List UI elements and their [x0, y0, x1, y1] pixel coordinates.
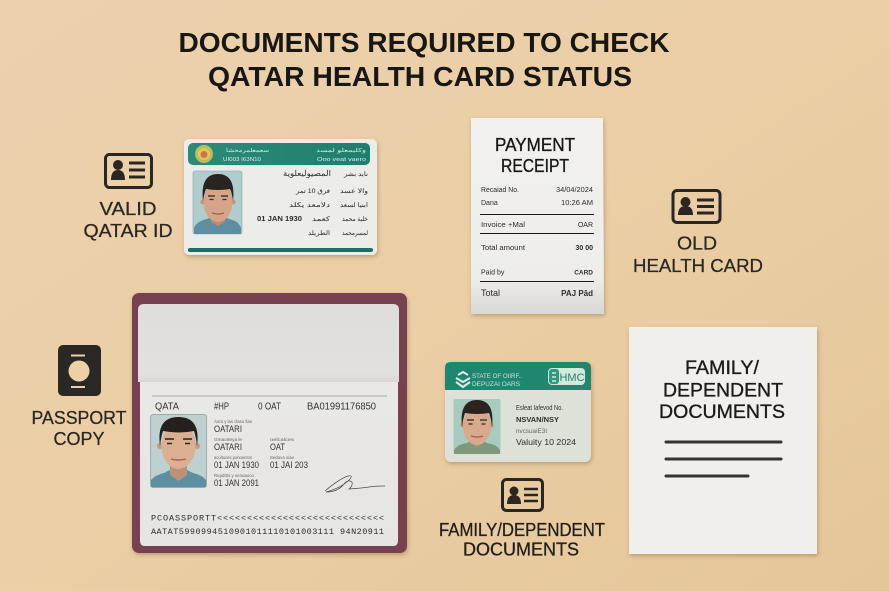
icon: family documents [502, 480, 542, 510]
receipt rows [481, 187, 593, 298]
passport fields: OATARI [214, 424, 242, 434]
receipt heading [495, 134, 575, 176]
passport machine readable zone: PCOASSPORTT<<<<<<<<<<<<<<<<<<<<<<<<<<<< [151, 514, 384, 524]
card fields: خلبة محمد [342, 215, 368, 223]
passport fields [214, 419, 308, 488]
card emblem [195, 145, 213, 163]
card fields: فرق 10 تمر [295, 188, 330, 195]
passport top line: QATA [155, 402, 179, 412]
card photo [193, 171, 242, 234]
passport fields: OATARI [214, 442, 242, 452]
card fields: والا عسد [340, 187, 368, 195]
passport machine readable zone [151, 514, 384, 537]
receipt rows: Paid by [481, 270, 505, 276]
passport top line: #HP [214, 402, 229, 412]
HMC fields: Esleat Iafevod No. [516, 405, 563, 412]
passport photo [150, 414, 206, 488]
label: passport copy [32, 407, 126, 449]
HMC emblem [456, 372, 470, 387]
passport fields: acultuces ponoentos [214, 455, 253, 460]
sheet heading: DEPENDENT [663, 380, 783, 402]
label: family dependent documents: FAMILY/DEPENDENT [439, 520, 605, 540]
card header text: سعمعلمرمحشا [226, 147, 269, 154]
sheet heading: DOCUMENTS [659, 401, 785, 423]
passport fields: Anra y las claso fias [214, 419, 253, 424]
passport fields: Sedova siae [270, 455, 294, 460]
card fields: كعمد [312, 215, 331, 223]
label: old health card: OLD [677, 232, 717, 254]
label: old health card [633, 232, 763, 276]
HMC dependent card [445, 362, 591, 462]
passport fields: 01 JAN 1930 [214, 460, 259, 470]
receipt rows: 10:26 AM [561, 200, 593, 207]
label: family dependent documents: DOCUMENTS [463, 540, 579, 560]
receipt rows: CARD [574, 270, 593, 276]
card fields [257, 169, 368, 237]
receipt heading: RECEIPT [501, 155, 569, 176]
icon: valid Qatar ID [106, 154, 152, 188]
card header text: UI003 I63N10 [223, 157, 261, 163]
HMC photo [454, 399, 500, 454]
sheet heading: FAMILY/ [685, 357, 760, 379]
title: QATAR HEALTH CARD STATUS [208, 61, 632, 92]
passport upper page [138, 304, 399, 382]
HMC header text: DEPUZAI OARS [472, 381, 521, 388]
sheet heading [659, 357, 785, 423]
card fields: نابد بشر [343, 170, 368, 178]
card fields: 01 JAN 1930 [257, 214, 302, 223]
card footer band [188, 248, 373, 252]
card header text: Ooo veat vaero [317, 157, 366, 163]
label: old health card: HEALTH CARD [633, 255, 763, 276]
payment receipt [471, 118, 604, 314]
HMC card header [445, 362, 591, 390]
card fields: دلامعد يكلد [289, 201, 330, 209]
passport fields: 01 JAI 203 [270, 460, 308, 470]
receipt rows: Total [481, 288, 500, 298]
card fields: لمسرمحمد [342, 229, 368, 237]
passport fields: Gmaorteya le [214, 437, 243, 442]
receipt heading: PAYMENT [495, 134, 575, 155]
passport cover [132, 293, 407, 553]
label: valid Qatar ID: VALID [100, 198, 156, 219]
family document sheet [629, 327, 817, 554]
label: valid Qatar ID: QATAR ID [84, 220, 172, 241]
HMC fields: nvcsuaiE3I [516, 429, 547, 435]
passport lower page [140, 382, 398, 546]
HMC fields: NSVAN/NSY [516, 417, 559, 424]
sheet lines [666, 442, 781, 476]
card header band [188, 143, 370, 165]
Qatar ID card [184, 139, 377, 255]
passport top line: 0 OAT [258, 402, 281, 412]
HMC header text [472, 373, 522, 388]
receipt rows: Total amount [481, 245, 525, 252]
HMC logo [548, 368, 585, 385]
icon: passport [58, 345, 101, 396]
card header text: وكليمعلو لمسد [316, 147, 366, 154]
receipt rows: PAJ Pād [561, 289, 593, 298]
HMC header text: STATE OF OIIRF.. [472, 373, 522, 380]
passport top line [155, 402, 376, 412]
label: family dependent documents [439, 520, 605, 560]
receipt rows: Dana [481, 200, 498, 207]
receipt rows: Invoice +Mal [481, 222, 525, 229]
title: DOCUMENTS REQUIRED TO CHECK [178, 27, 670, 58]
card header text [223, 147, 366, 163]
HMC logo: HMC [560, 372, 585, 384]
receipt rows: 34/04/2024 [556, 187, 593, 194]
passport fields: OAT [270, 442, 286, 452]
HMC fields [516, 405, 576, 447]
passport fields: Repdrtis y senoaoco [214, 473, 254, 478]
title [178, 27, 670, 92]
receipt rows: OAR [578, 222, 593, 229]
passport machine readable zone: AATAT5990994510901011110101003111 94N20911 [151, 527, 384, 537]
passport booklet [132, 293, 407, 553]
label: valid Qatar ID [84, 198, 172, 241]
label: passport copy: COPY [54, 428, 104, 449]
passport top line: BA01991176850 [307, 402, 376, 412]
passport signature [325, 476, 385, 492]
card fields: الطريلد [308, 229, 330, 237]
card fields: المصيوليعلوية [283, 169, 331, 178]
label: passport copy: PASSPORT [32, 407, 126, 428]
card fields: ابنيا لسعد [340, 201, 368, 209]
passport fields: 01 JAN 2091 [214, 478, 259, 488]
passport fields: oelcalces [270, 437, 295, 442]
icon: old health card [673, 190, 720, 222]
HMC fields: Valuity 10 2024 [516, 437, 576, 447]
receipt rows: Recaiad No. [481, 187, 519, 194]
receipt rows: 30 00 [575, 245, 593, 252]
